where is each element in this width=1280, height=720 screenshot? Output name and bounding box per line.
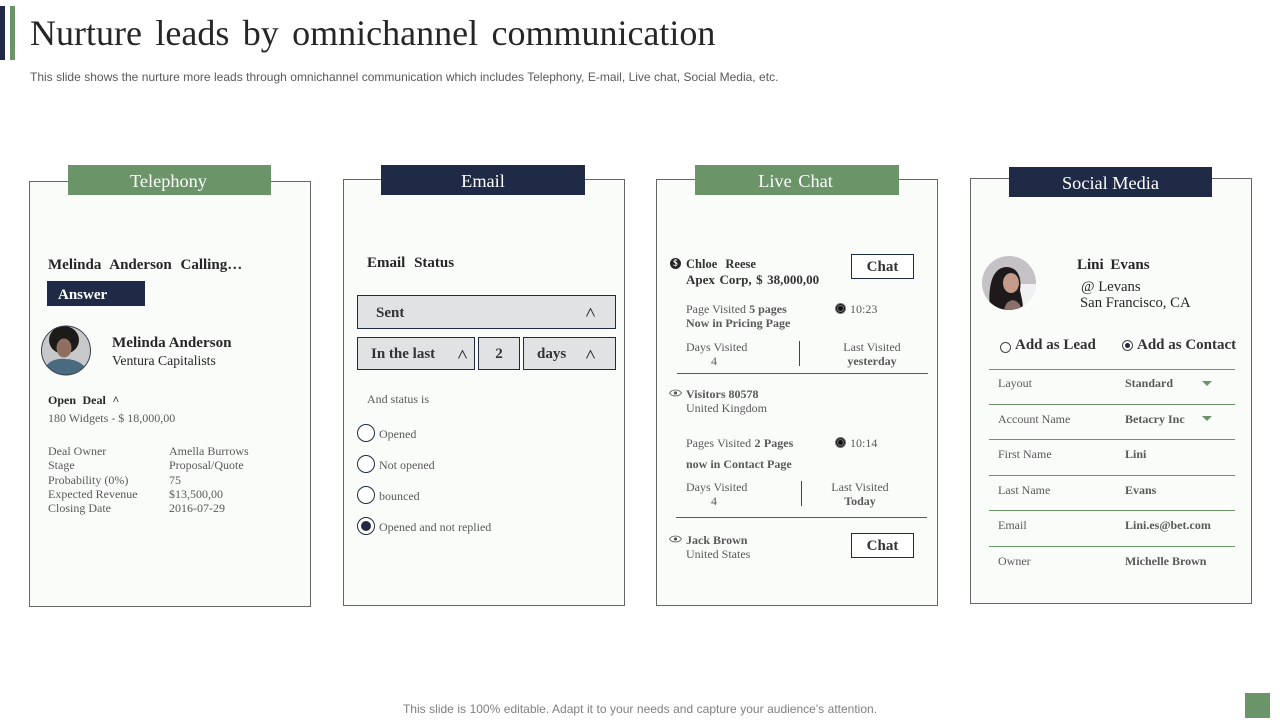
icon: Melinda avatar xyxy=(41,326,91,376)
in the last dropdown xyxy=(357,337,475,370)
sent dropdown xyxy=(357,295,616,329)
chat button 2 xyxy=(851,533,914,558)
add as lead option: Add as Lead xyxy=(1015,337,1096,353)
days dropdown xyxy=(523,337,616,370)
social media header: Social Media xyxy=(1062,173,1159,193)
field: email: Email xyxy=(998,518,1027,532)
deal value: 180 Widgets - $ 18,000,00 xyxy=(48,411,175,425)
chloe company: Apex Corp, $ 38,000,00 xyxy=(686,272,819,287)
last visited 2: Last Visited xyxy=(831,480,889,494)
field: last name xyxy=(998,483,1156,497)
icon: clock 2 xyxy=(835,437,846,448)
field: account name: Account Name xyxy=(998,412,1070,426)
days visited: 4 xyxy=(711,354,717,368)
days visited 2 xyxy=(686,480,748,508)
icon: clock xyxy=(835,303,846,314)
panel: telephony xyxy=(29,181,311,607)
deal labels: Deal Owner xyxy=(48,444,106,458)
current page: Now in Pricing Page xyxy=(686,316,790,330)
icon: dollar badge xyxy=(670,258,681,269)
visitors: Visitors 80578 xyxy=(686,387,759,401)
field: layout: Standard xyxy=(1125,376,1173,390)
icon: eye 2 xyxy=(669,536,682,542)
option: bounced xyxy=(357,486,420,504)
divider xyxy=(799,341,800,366)
option: opened xyxy=(357,424,416,442)
option: opened: Opened xyxy=(379,427,416,441)
deal values: 2016-07-29 xyxy=(169,501,225,515)
chloe name: Chloe Reese xyxy=(686,257,756,271)
field: layout xyxy=(998,376,1212,390)
title: Nurture leads by omnichannel communication xyxy=(30,13,715,53)
field: account name xyxy=(998,412,1212,426)
field: last name: Evans xyxy=(1125,483,1156,497)
number dropdown: 2 xyxy=(495,346,503,362)
field: last name: Last Name xyxy=(998,483,1050,497)
panel: social media xyxy=(970,178,1252,604)
days visited xyxy=(686,340,748,368)
option: not opened xyxy=(357,455,435,473)
icon: Lini avatar xyxy=(982,256,1036,310)
panel: email xyxy=(343,179,625,606)
profile handle: @ Levans xyxy=(1081,279,1141,295)
field: account name: Betacry Inc xyxy=(1125,412,1185,426)
profile location: San Francisco, CA xyxy=(1080,295,1191,311)
field: owner: Owner xyxy=(998,554,1031,568)
days visited 2: Days Visited xyxy=(686,480,747,494)
profile name: Lini Evans xyxy=(1077,257,1150,273)
field: first name: Lini xyxy=(1125,447,1146,461)
field: first name: First Name xyxy=(998,447,1052,461)
last visited xyxy=(843,340,901,368)
option: opened and not replied: Opened and not replied xyxy=(379,520,491,534)
number dropdown xyxy=(478,337,520,370)
days visited: Days Visited xyxy=(686,340,747,354)
chat button xyxy=(851,254,914,279)
deal labels: Closing Date xyxy=(48,501,111,515)
in the last dropdown: In the last xyxy=(371,346,435,362)
deal labels xyxy=(48,444,138,515)
visit time: 10:23 xyxy=(850,302,877,316)
add as contact option: Add as Contact xyxy=(1137,337,1236,353)
option: opened and not replied xyxy=(357,517,492,535)
field: layout: Layout xyxy=(998,376,1032,390)
field: owner: Michelle Brown xyxy=(1125,554,1206,568)
live chat header: Live Chat xyxy=(758,171,833,191)
field: owner xyxy=(998,554,1206,568)
email status heading: Email Status xyxy=(367,255,454,271)
pages visited: Page Visited 5 pages xyxy=(686,302,787,316)
footer accent square xyxy=(1245,693,1270,718)
visitor country: United Kingdom xyxy=(686,401,767,415)
deal values: 75 xyxy=(169,473,181,487)
visit time 2: 10:14 xyxy=(850,436,877,450)
last visited 2 xyxy=(831,480,889,508)
jack name: Jack Brown xyxy=(686,533,747,547)
open deal: Open Deal ^ xyxy=(48,393,119,407)
days dropdown: days xyxy=(537,346,566,362)
chat button: Chat xyxy=(867,259,898,275)
deal values: Proposal/Quote xyxy=(169,458,244,472)
field: first name xyxy=(998,447,1146,461)
contact name: Melinda Anderson xyxy=(112,335,232,351)
social media header xyxy=(1009,167,1212,197)
live chat header xyxy=(695,165,899,195)
last visited 2: Today xyxy=(844,494,876,508)
sent dropdown: Sent xyxy=(376,305,404,321)
contact company: Ventura Capitalists xyxy=(112,353,216,368)
title accent bars xyxy=(0,6,15,60)
email header xyxy=(381,165,585,195)
deal labels: Expected Revenue xyxy=(48,487,138,501)
jack country: United States xyxy=(686,547,750,561)
telephony header xyxy=(68,165,271,195)
contact page: now in Contact Page xyxy=(686,457,792,471)
subtitle: This slide shows the nurture more leads through omnichannel communication which includes Telephony, E-mail, Live chat, Social Media, etc. xyxy=(30,70,778,84)
separator 2 xyxy=(676,517,927,518)
field: email xyxy=(998,518,1211,532)
icon: eye xyxy=(669,390,682,396)
icon: dollar badge: $ xyxy=(673,258,678,268)
option: not opened: Not opened xyxy=(379,458,435,472)
divider 2 xyxy=(801,481,802,506)
days visited 2: 4 xyxy=(711,494,717,508)
deal values: $13,500,00 xyxy=(169,487,223,501)
email header: Email xyxy=(461,171,505,191)
deal labels: Probability (0%) xyxy=(48,473,128,487)
deal values xyxy=(169,444,249,515)
answer button xyxy=(47,281,145,306)
telephony header: Telephony xyxy=(130,171,207,191)
answer button: Answer xyxy=(58,287,107,303)
pages visited 2: Pages Visited 2 Pages xyxy=(686,436,793,450)
chat button 2: Chat xyxy=(867,538,898,554)
separator xyxy=(677,373,928,374)
deal values: Amella Burrows xyxy=(169,444,249,458)
caller heading: Melinda Anderson Calling… xyxy=(48,257,242,273)
status label: And status is xyxy=(367,392,429,406)
panel: live chat xyxy=(656,179,938,606)
option: bounced: bounced xyxy=(379,489,420,503)
last visited: Last Visited xyxy=(843,340,901,354)
last visited: yesterday xyxy=(847,354,897,368)
deal labels: Stage xyxy=(48,458,75,472)
footer note: This slide is 100% editable. Adapt it to your needs and capture your audience's attention. xyxy=(403,702,877,716)
field: email: Lini.es@bet.com xyxy=(1125,518,1211,532)
